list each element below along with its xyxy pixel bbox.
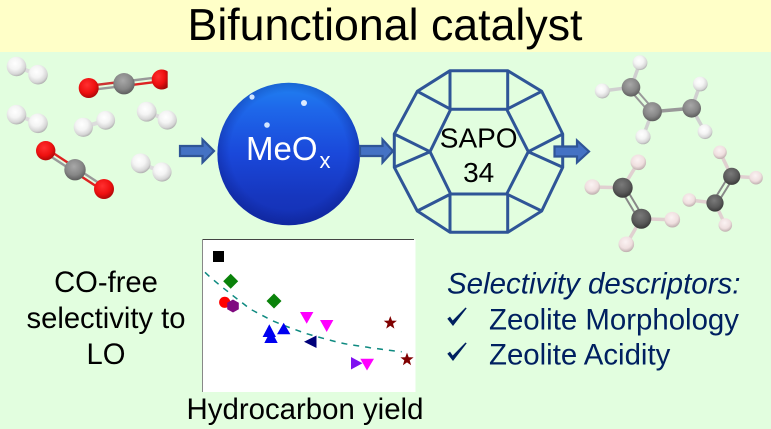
marker: purple hexagon [227,300,239,312]
marker: navy triangle [304,336,316,348]
selectivity descriptors list: Zeolite Acidity [489,338,671,372]
markers: blue triangles [263,323,290,343]
y-axis label: CO-free selectivity to LO: CO-free [54,267,158,299]
x-axis label: Hydrocarbon yield: Hydrocarbon yield [187,393,423,426]
markers: magenta triangles [300,312,374,370]
y-axis label: CO-free selectivity to LO [27,267,185,371]
SAPO-34 zeolite cage [394,71,563,232]
markers: dark red stars [384,316,414,365]
markers: green diamonds [223,274,282,308]
icon: check mark [447,342,467,361]
marker: red circle [219,297,230,308]
y-axis label: CO-free selectivity to LO: selectivity to [27,303,185,335]
MeOx sphere: MeO [246,130,318,167]
product molecules: light olefins [584,55,763,252]
selectivity descriptors list: Zeolite Morphology [489,304,739,336]
MeOx sphere [217,83,360,225]
MeOx sphere: x [320,148,330,173]
title banner [0,0,771,52]
SAPO-34 zeolite cage: 34 [463,157,494,188]
scatter chart [202,240,416,392]
marker: black square [213,251,224,262]
y-axis label: CO-free selectivity to LO: LO [87,339,125,371]
marker: violet triangle [351,357,362,370]
title banner: Bifunctional catalyst [188,1,583,50]
selectivity descriptors list: Selectivity descriptors: [447,267,740,300]
SAPO-34 zeolite cage: SAPO [440,122,518,154]
selectivity descriptors list [447,267,740,372]
arrow: MeOx to SAPO-34 [360,140,393,162]
reactant molecules: H2 and CO2 [7,57,177,199]
icon: check mark [447,308,467,326]
trend line [205,272,402,352]
arrow: SAPO-34 to olefins [554,140,589,162]
arrow: reactants to MeOx [180,140,214,162]
